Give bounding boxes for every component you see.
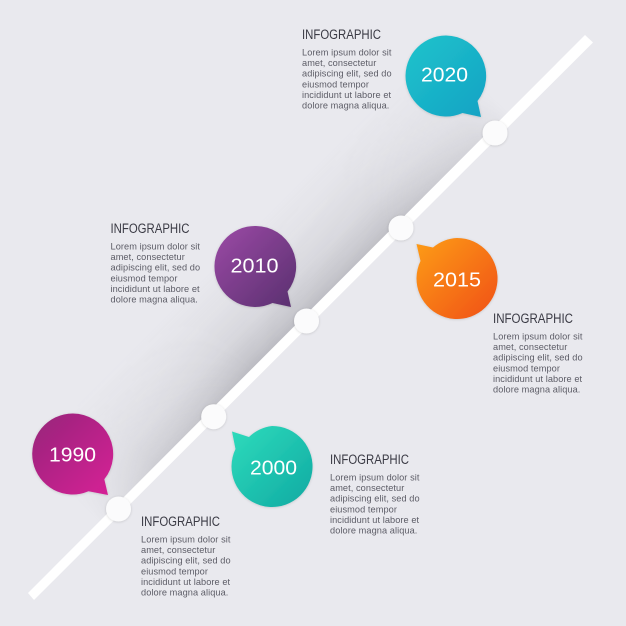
node 1990: [106, 496, 131, 522]
bubble: 2000: 2000: [250, 458, 297, 480]
node 2020: [482, 120, 508, 146]
text block: 2000: dolore magna aliqua.: [330, 526, 417, 536]
text block: 2010: INFOGRAPHIC: [110, 221, 190, 236]
timeline shadow: [110, 118, 488, 498]
text block: 2010: amet, consectetur: [110, 252, 185, 262]
bubble: 2020: [406, 36, 486, 117]
text block: 1990: INFOGRAPHIC: [141, 514, 220, 529]
text block: 2010: eiusmod tempor: [110, 273, 178, 283]
bubble: 2000: [232, 426, 313, 507]
text block: 2015: [493, 311, 583, 395]
text block: 2010: incididunt ut labore et: [110, 284, 200, 294]
text block: 2015: eiusmod tempor: [493, 363, 560, 373]
text block: 1990: adipiscing elit, sed do: [141, 556, 231, 566]
text block: 2000: amet, consectetur: [330, 483, 404, 493]
bubble: 2010: 2010: [230, 256, 278, 278]
bubble: 1990: 1990: [49, 444, 96, 466]
text block: 2015: amet, consectetur: [493, 342, 567, 352]
text block: 2010: Lorem ipsum dolor sit: [110, 242, 200, 252]
text block: 2010: adipiscing elit, sed do: [110, 263, 200, 273]
bubble: 2015: 2015: [433, 270, 481, 292]
text block: 2000: Lorem ipsum dolor sit: [330, 472, 420, 482]
text block: 2015: adipiscing elit, sed do: [493, 353, 583, 363]
text block: 2020: incididunt ut labore et: [302, 90, 392, 100]
text block: 2020: adipiscing elit, sed do: [302, 69, 392, 79]
node 2010: [294, 308, 319, 334]
text block: 1990: eiusmod tempor: [141, 566, 208, 576]
text block: 2020: [302, 27, 392, 111]
text block: 2000: incididunt ut labore et: [330, 515, 420, 525]
text block: 2015: incididunt ut labore et: [493, 374, 583, 384]
text block: 1990: dolore magna aliqua.: [141, 588, 228, 598]
text block: 2020: Lorem ipsum dolor sit: [302, 48, 392, 58]
text block: 2015: Lorem ipsum dolor sit: [493, 332, 583, 342]
node 2000: [201, 404, 226, 429]
bubble: 2015: [416, 238, 498, 319]
text block: 2020: eiusmod tempor: [302, 79, 369, 89]
text block: 2015: INFOGRAPHIC: [493, 311, 573, 326]
text block: 2000: [330, 452, 420, 536]
text block: 2020: INFOGRAPHIC: [302, 27, 381, 42]
text block: 2020: dolore magna aliqua.: [302, 101, 389, 111]
bubble: 2010: [214, 226, 296, 307]
text block: 2015: dolore magna aliqua.: [493, 385, 580, 395]
text block: 2000: INFOGRAPHIC: [330, 452, 409, 467]
text block: 2010: dolore magna aliqua.: [110, 295, 198, 305]
text block: 1990: incididunt ut labore et: [141, 577, 231, 587]
text block: 2000: adipiscing elit, sed do: [330, 494, 420, 504]
bubble: 1990: [32, 413, 113, 495]
text block: 1990: Lorem ipsum dolor sit: [141, 534, 231, 544]
text block: 2010: [110, 221, 200, 305]
text block: 1990: amet, consectetur: [141, 545, 215, 555]
text block: 2020: amet, consectetur: [302, 58, 376, 68]
bubble: 2020: 2020: [421, 64, 468, 86]
text block: 1990: [141, 514, 231, 598]
text block: 2000: eiusmod tempor: [330, 504, 397, 514]
node 2015: [388, 216, 414, 240]
